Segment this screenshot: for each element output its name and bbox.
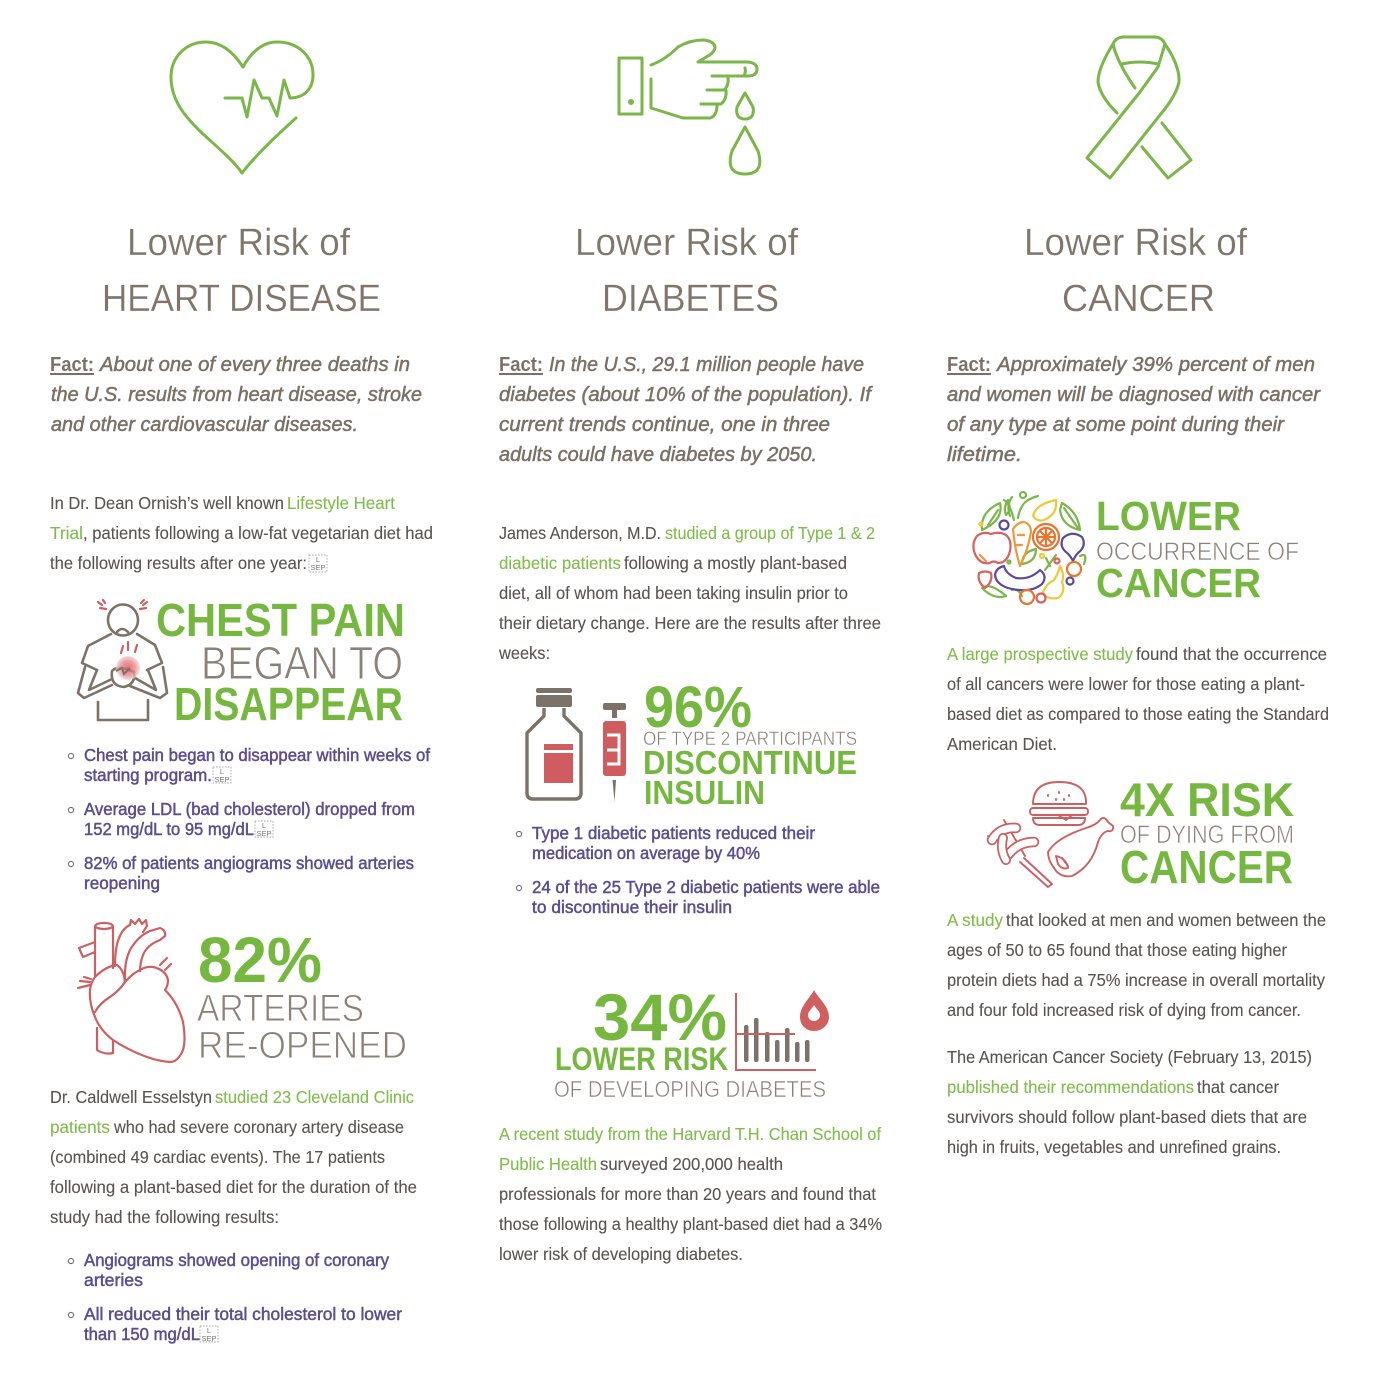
icon: hand with blood drops xyxy=(619,40,760,174)
text block: cancer fact: lifetime. xyxy=(947,443,1022,466)
text block: diabetes fact xyxy=(499,353,873,466)
list: Ornish results xyxy=(68,745,430,893)
list: Esselstyn results: All reduced their total cholesterol to lower xyxy=(84,1304,402,1324)
text block: Esselstyn study: following a plant-based diet for the duration of the xyxy=(50,1177,417,1197)
list: Ornish results: L xyxy=(220,767,224,776)
heading: lower risk of cancer: CANCER xyxy=(1062,278,1215,320)
list: Ornish results: 152 mg/dL to 95 mg/dL xyxy=(84,819,254,839)
heading: lower risk of cancer: Lower Risk of xyxy=(1024,222,1247,264)
text block: Ornish study intro xyxy=(50,493,433,573)
text block: protein study: that looked at men and women between the xyxy=(1006,910,1326,930)
text block: American Cancer Society recommendations: The American Cancer Society (February 13, 2015) xyxy=(947,1047,1312,1067)
list: Esselstyn results: SEP xyxy=(201,1334,217,1343)
text block: Harvard study: A recent study from the Harvard T.H. Chan School of xyxy=(499,1124,881,1144)
graphic: 4x risk of dying from cancer: CANCER xyxy=(1120,841,1293,893)
text block: Harvard study: lower risk of developing diabetes. xyxy=(499,1244,743,1264)
graphic: 34% lower risk of developing diabetes xyxy=(554,980,829,1102)
heading: lower risk of diabetes xyxy=(575,222,798,320)
text block: diabetes fact: current trends continue, one in three xyxy=(499,413,830,436)
list: Anderson results: to discontinue their insulin xyxy=(532,897,732,917)
text block: Ornish study intro: SEP xyxy=(310,563,326,572)
text block: heart disease fact: Fact: xyxy=(50,353,94,376)
graphic: 96% discontinue insulin: 96% xyxy=(644,675,752,740)
text block: prospective study: found that the occurrence xyxy=(1136,644,1327,664)
text block: Ornish study intro: Trial xyxy=(50,523,83,543)
graphic: lower occurrence of cancer: CANCER xyxy=(1096,560,1261,606)
list: Ornish results: starting program. xyxy=(84,765,212,785)
text block: heart disease fact: the U.S. results from heart disease, stroke xyxy=(51,383,422,406)
text block: Anderson study intro: diet, all of whom had been taking insulin prior to xyxy=(499,583,848,603)
panel: heart disease column xyxy=(50,42,433,1344)
list: Ornish results: L xyxy=(262,821,266,830)
heading: lower risk of diabetes: Lower Risk of xyxy=(575,222,798,264)
icon: burger, sausages and chicken leg xyxy=(988,782,1113,887)
graphic: 4x risk of dying from cancer: OF DYING FROM xyxy=(1120,821,1294,849)
graphic: 4x risk of dying from cancer: 4X RISK xyxy=(1120,773,1294,826)
text block: Ornish study intro: , patients following a low-fat vegetarian diet had xyxy=(83,523,433,543)
text block: Esselstyn study: (combined 49 cardiac events). The 17 patients xyxy=(50,1147,385,1167)
text block: Anderson study intro: diabetic patients xyxy=(499,553,621,573)
text block: prospective study: based diet as compared to those eating the Standard xyxy=(947,704,1329,724)
list: Esselstyn results: arteries xyxy=(84,1270,143,1290)
text block: protein study xyxy=(947,910,1326,1020)
graphic: chest pain began to disappear: CHEST PAIN xyxy=(156,594,405,646)
text block: Ornish study intro: the following results after one year: xyxy=(50,553,307,573)
graphic: 82% arteries re-opened: RE-OPENED xyxy=(198,1025,407,1067)
graphic: lower occurrence of cancer xyxy=(973,492,1299,606)
text block: heart disease fact xyxy=(50,353,422,436)
graphic: lower occurrence of cancer: LOWER xyxy=(1096,493,1241,539)
icon: insulin bottle and syringe xyxy=(527,688,626,802)
text block: prospective study: American Diet. xyxy=(947,734,1057,754)
list: Anderson results xyxy=(516,823,880,917)
graphic: 96% discontinue insulin: INSULIN xyxy=(644,774,765,811)
text block: Esselstyn study: Dr. Caldwell Esselstyn xyxy=(50,1087,212,1107)
text block: Esselstyn study: study had the following results: xyxy=(50,1207,279,1227)
graphic: 34% lower risk of developing diabetes: 34% xyxy=(593,980,727,1054)
text block: Anderson study intro xyxy=(498,523,881,663)
graphic: 96% discontinue insulin: DISCONTINUE xyxy=(643,744,857,781)
text block: cancer fact: Fact: xyxy=(947,353,991,376)
text block: Anderson study intro: their dietary change. Here are the results after three xyxy=(499,613,881,633)
graphic: 82% arteries re-opened xyxy=(78,919,407,1067)
icon: person holding chest xyxy=(78,600,167,720)
text block: diabetes fact: Fact: xyxy=(499,353,543,376)
text block: cancer fact: and women will be diagnosed with cancer xyxy=(947,383,1321,406)
graphic: chest pain began to disappear: DISAPPEAR xyxy=(174,678,403,730)
text block: Ornish study intro: In Dr. Dean Ornish’s well known xyxy=(50,493,284,513)
text block: heart disease fact: and other cardiovascular diseases. xyxy=(51,413,358,436)
text block: Anderson study intro: studied a group of Type 1 & 2 xyxy=(665,523,875,543)
heading: lower risk of heart disease: HEART DISEASE xyxy=(102,278,381,320)
list: Ornish results: SEP xyxy=(256,829,272,838)
graphic: 34% lower risk of developing diabetes: OF DEVELOPING DIABETES xyxy=(554,1076,826,1102)
text block: prospective study xyxy=(947,644,1329,754)
graphic: 96% discontinue insulin xyxy=(527,675,857,811)
text block: American Cancer Society recommendations: that cancer xyxy=(1197,1077,1279,1097)
text block: cancer fact: Approximately 39% percent of men xyxy=(995,353,1315,376)
graphic: 82% arteries re-opened: ARTERIES xyxy=(197,988,364,1030)
list: Esselstyn results: Angiograms showed opening of coronary xyxy=(84,1250,389,1270)
list: Anderson results: 24 of the 25 Type 2 diabetic patients were able xyxy=(532,877,880,897)
graphic: chest pain began to disappear xyxy=(78,594,405,730)
text block: Esselstyn study xyxy=(50,1087,417,1227)
list: Ornish results: SEP xyxy=(214,775,230,784)
list: Esselstyn results xyxy=(68,1250,402,1344)
text block: Esselstyn study: studied 23 Cleveland Clinic xyxy=(215,1087,414,1107)
text block: diabetes fact: diabetes (about 10% of the population). If xyxy=(499,383,873,406)
text block: diabetes fact: In the U.S., 29.1 million people have xyxy=(549,353,864,376)
icon: anatomical heart xyxy=(78,919,184,1062)
text block: diabetes fact: adults could have diabetes by 2050. xyxy=(499,443,817,466)
text block: Anderson study intro: following a mostly plant-based xyxy=(624,553,847,573)
text block: Ornish study intro: Lifestyle Heart xyxy=(287,493,395,513)
text block: American Cancer Society recommendations: survivors should follow plant-based diets that are xyxy=(947,1107,1307,1127)
text block: Harvard study: surveyed 200,000 health xyxy=(600,1154,783,1174)
graphic: 4x risk of dying from cancer xyxy=(988,773,1294,893)
heading: lower risk of cancer xyxy=(1024,222,1247,320)
text block: cancer fact xyxy=(947,353,1321,466)
text block: cancer fact: of any type at some point during their xyxy=(947,413,1285,436)
heading: lower risk of diabetes: DIABETES xyxy=(602,278,779,320)
list: Ornish results: Chest pain began to disappear within weeks of xyxy=(84,745,430,765)
list: Anderson results: Type 1 diabetic patients reduced their xyxy=(532,823,815,843)
text block: American Cancer Society recommendations xyxy=(947,1047,1312,1157)
list: Esselstyn results: than 150 mg/dL xyxy=(84,1324,200,1344)
text block: Harvard study: professionals for more than 20 years and found that xyxy=(499,1184,876,1204)
graphic: 96% discontinue insulin: OF TYPE 2 PARTICIPANTS xyxy=(643,729,857,750)
text block: protein study: A study xyxy=(947,910,1003,930)
graphic: 82% arteries re-opened: 82% xyxy=(198,924,322,996)
graphic: chest pain began to disappear: BEGAN TO xyxy=(201,637,403,689)
text block: Anderson study intro: James Anderson, M.D. xyxy=(499,523,661,543)
text block: prospective study: of all cancers were lower for those eating a plant- xyxy=(947,674,1305,694)
text block: American Cancer Society recommendations: high in fruits, vegetables and unrefined grains. xyxy=(947,1137,1281,1157)
panel: cancer column xyxy=(947,37,1329,1157)
graphic: 34% lower risk of developing diabetes: LOWER RISK xyxy=(555,1041,728,1077)
icon: heart with pulse line xyxy=(171,42,313,173)
icon: awareness ribbon xyxy=(1087,37,1191,178)
list: Ornish results: 82% of patients angiograms showed arteries xyxy=(84,853,414,873)
text block: protein study: and four fold increased risk of dying from cancer. xyxy=(947,1000,1301,1020)
text block: prospective study: A large prospective study xyxy=(947,644,1133,664)
text block: Esselstyn study: who had severe coronary artery disease xyxy=(113,1117,404,1137)
list: Esselstyn results: L xyxy=(207,1326,211,1335)
icon: circle of fruits and vegetables xyxy=(973,492,1085,604)
text block: Ornish study intro: L xyxy=(316,555,320,564)
text block: protein study: protein diets had a 75% increase in overall mortality xyxy=(947,970,1325,990)
chart: blood glucose bars and drop xyxy=(736,990,829,1070)
text block: Esselstyn study: patients xyxy=(50,1117,110,1137)
text block: Harvard study xyxy=(499,1124,882,1264)
text block: protein study: ages of 50 to 65 found that those eating higher xyxy=(947,940,1287,960)
text block: Harvard study: Public Health xyxy=(499,1154,597,1174)
list: Anderson results: medication on average by 40% xyxy=(532,843,760,863)
list: Ornish results: Average LDL (bad cholesterol) dropped from xyxy=(84,799,415,819)
text block: Anderson study intro: weeks: xyxy=(498,643,550,663)
graphic: lower occurrence of cancer: OCCURRENCE OF xyxy=(1096,538,1299,566)
heading: lower risk of heart disease: Lower Risk of xyxy=(127,222,350,264)
heading: lower risk of heart disease xyxy=(102,222,381,320)
list: Ornish results: reopening xyxy=(84,873,160,893)
panel: diabetes column xyxy=(498,40,882,1264)
text block: American Cancer Society recommendations: published their recommendations xyxy=(947,1077,1194,1097)
text block: Harvard study: those following a healthy plant-based diet had a 34% xyxy=(499,1214,882,1234)
text block: heart disease fact: About one of every three deaths in xyxy=(98,353,410,376)
